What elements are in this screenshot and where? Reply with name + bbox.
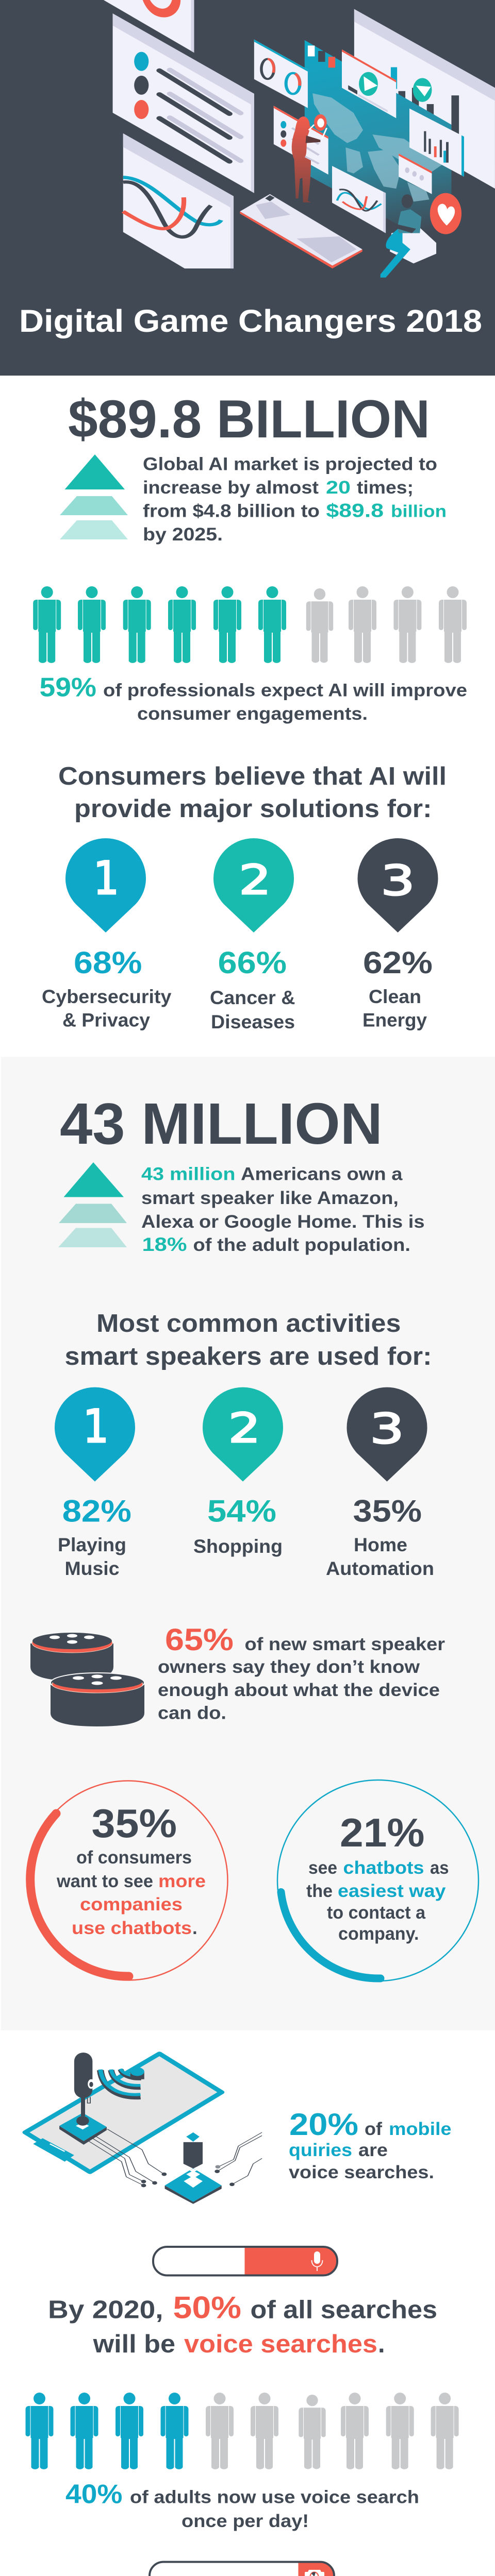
wifi signal: [101, 2069, 141, 2097]
dashboard panel: list: [113, 13, 254, 193]
illustration: phone with microphone and circuit: [25, 2053, 262, 2204]
icon: smart speakers: [30, 1633, 144, 1726]
activity 1: playing music: Music: [65, 1558, 120, 1579]
activity 3: home automation: 35%: [353, 1494, 422, 1529]
text: 50 percent voice searches: voice searches: [184, 2330, 377, 2358]
seated man with tablet: [381, 193, 461, 278]
callout: 35 percent want chatbots: [28, 1781, 228, 1980]
screen: list: [274, 106, 328, 175]
activity 3: home automation: Home: [354, 1534, 407, 1555]
activity 2: shopping: [193, 1387, 283, 1557]
icon: pin 1: [65, 838, 146, 933]
section: voice search: [25, 2053, 475, 2576]
text: 20 percent mobile queries: of: [365, 2119, 382, 2139]
solution 2: cancer and diseases: Diseases: [211, 1011, 295, 1032]
text: 20 percent mobile queries: are: [358, 2140, 388, 2160]
icon: pin 1: 1: [93, 852, 119, 905]
text: AI market projection: $89.8: [326, 500, 384, 521]
callout: 35 percent want chatbots: want to see: [56, 1871, 153, 1891]
microphone on pad: [59, 2053, 107, 2145]
icon: pin 2: [213, 838, 294, 933]
search bar: voice: [153, 2247, 338, 2275]
heading: common activities: [65, 1310, 432, 1370]
solution 1: cybersecurity: 68%: [74, 945, 142, 980]
icon: camera: [305, 2570, 324, 2576]
heading: common activities: smart speakers are used for:: [65, 1343, 432, 1370]
text: 40 percent statistic: of adults now use voice search: [130, 2487, 419, 2507]
text: smart speaker ownership: Alexa or Google Home. This is: [141, 1212, 425, 1232]
callout: 35 percent want chatbots: 35%: [92, 1801, 177, 1846]
text: smart speaker ownership: [141, 1164, 425, 1255]
solution 2: cancer and diseases: 66%: [218, 945, 287, 980]
activity 1: playing music: [55, 1387, 135, 1579]
heading: common activities: Most common activities: [96, 1310, 401, 1337]
phone: [25, 2054, 222, 2172]
text: 65 percent statistic: can do.: [158, 1703, 226, 1723]
text: 20 percent mobile queries: quiries: [289, 2140, 352, 2160]
heading: major solutions: [58, 762, 447, 823]
screen: wave chart: [332, 166, 386, 233]
text: 59 percent statistic: of professionals expect AI will improve: [103, 680, 467, 701]
activity 2: shopping: Shopping: [193, 1536, 283, 1557]
solution 3: clean energy: Clean: [369, 986, 421, 1007]
screen: play video: [342, 49, 396, 118]
text: 40 percent statistic: [65, 2480, 419, 2531]
text: AI market projection: billion: [391, 502, 447, 520]
solution 1: cybersecurity: Cybersecurity: [42, 986, 172, 1007]
icon: pin 1: 1: [83, 1400, 109, 1453]
text: AI market projection: [143, 454, 447, 545]
keyboard: [240, 194, 362, 268]
icon: pin 3: [358, 838, 438, 933]
heading: major solutions: provide major solutions for:: [74, 795, 432, 823]
icon: pin 3: 3: [381, 857, 415, 905]
dashboard panel: line chart: [123, 133, 234, 268]
world map screen: [305, 40, 451, 253]
receiver tower: [165, 2132, 222, 2204]
text: AI market projection: 20: [326, 478, 351, 498]
icon: pin 1: [55, 1387, 135, 1482]
activity 3: home automation: [326, 1387, 434, 1579]
screen: donut charts: [254, 40, 308, 108]
text: 40 percent statistic: once per day!: [182, 2511, 309, 2531]
icon: pin 3: 3: [370, 1405, 404, 1453]
callout: 35 percent want chatbots: of consumers: [76, 1848, 192, 1868]
callout: 21 percent chatbots easiest: the: [306, 1881, 333, 1901]
solution 1: cybersecurity: [42, 838, 172, 1031]
screen: three dots: [399, 154, 432, 194]
callout: 21 percent chatbots easiest: easiest way: [338, 1881, 446, 1901]
text: 50 percent voice searches: 50%: [173, 2291, 241, 2325]
solution 3: clean energy: [358, 838, 438, 1031]
text: 50 percent voice searches: will be: [93, 2330, 175, 2358]
search bar: images: [150, 2562, 335, 2576]
text: smart speaker ownership: of the adult population.: [193, 1235, 410, 1255]
big number: $89.8 billion: $89.8 BILLION: [68, 389, 430, 449]
text: AI market projection: times;: [357, 478, 414, 498]
pictogram: 40 percent of adults: [26, 2393, 459, 2469]
callout: 21 percent chatbots easiest: 21%: [340, 1810, 425, 1855]
text: AI market projection: from $4.8 billion to: [143, 501, 320, 521]
circuit traces: [87, 2129, 262, 2185]
callout: 21 percent chatbots easiest: company.: [338, 1924, 419, 1944]
text: 65 percent statistic: enough about what the device: [158, 1680, 440, 1700]
text: 59 percent statistic: consumer engagements.: [137, 704, 368, 724]
dashboard panel: far right: [354, 9, 495, 189]
text: 65 percent statistic: owners say they don’t know: [158, 1657, 420, 1677]
icon: pin 3: [346, 1387, 427, 1482]
activity 1: playing music: 82%: [62, 1494, 131, 1529]
text: 50 percent voice searches: [48, 2291, 437, 2358]
circuit dots: [141, 2165, 235, 2187]
text: 20 percent mobile queries: voice searches.: [289, 2162, 434, 2182]
dashboard panel: top ring: [104, 0, 194, 53]
solution 2: cancer and diseases: Cancer &: [210, 987, 295, 1008]
callout: 21 percent chatbots easiest: as: [430, 1858, 449, 1878]
section: AI market: [33, 389, 467, 1032]
solution 3: clean energy: 62%: [363, 945, 433, 980]
text: 20 percent mobile queries: [289, 2107, 452, 2182]
header illustration: data dashboards: [104, 0, 495, 278]
text: 65 percent statistic: 65%: [165, 1622, 234, 1657]
callout: 35 percent want chatbots: use chatbots: [72, 1918, 192, 1938]
text: 50 percent voice searches: By 2020,: [48, 2296, 163, 2324]
text: smart speaker ownership: 43 million: [141, 1164, 235, 1184]
heading: major solutions: Consumers believe that AI will: [58, 762, 447, 790]
callout: 35 percent want chatbots: companies: [80, 1894, 183, 1914]
solution 2: cancer and diseases: [210, 838, 295, 1032]
pictogram: 59 percent of professionals: [33, 586, 467, 663]
text: 50 percent voice searches: of all searches: [251, 2296, 437, 2324]
text: 65 percent statistic: [158, 1622, 445, 1723]
text: 50 percent voice searches: .: [378, 2330, 385, 2358]
woman figure: [292, 114, 327, 202]
header panel: [0, 0, 495, 376]
callout: 21 percent chatbots easiest: [277, 1780, 478, 1981]
activity 1: playing music: Playing: [58, 1534, 126, 1555]
section: smart speakers: [1, 1057, 495, 2030]
solution 3: clean energy: Energy: [362, 1010, 427, 1031]
icon: pin 2: 2: [228, 1405, 260, 1452]
callout: 35 percent want chatbots: more: [158, 1871, 206, 1891]
text: AI market projection: Global AI market is projected to: [143, 454, 437, 474]
activity 3: home automation: Automation: [326, 1558, 434, 1579]
text: 59 percent statistic: 59%: [39, 673, 96, 703]
callout: 21 percent chatbots easiest: to contact a: [327, 1903, 426, 1923]
text: 40 percent statistic: 40%: [65, 2480, 123, 2510]
text: AI market projection: by 2025.: [143, 524, 223, 545]
screen: bar chart: [409, 108, 464, 177]
text: 20 percent mobile queries: 20%: [289, 2107, 358, 2142]
callout: 21 percent chatbots easiest: see: [308, 1858, 337, 1878]
text: smart speaker ownership: smart speaker like Amazon,: [141, 1188, 399, 1208]
activity 2: shopping: 54%: [207, 1494, 276, 1529]
text: AI market projection: increase by almost: [143, 478, 319, 498]
icon: stacked pyramid: [58, 1162, 127, 1247]
text: 59 percent statistic: [39, 673, 467, 724]
big number: 43 million: 43 MILLION: [60, 1091, 383, 1156]
callout: 21 percent chatbots easiest: chatbots: [343, 1858, 424, 1878]
icon: pin 2: 2: [239, 857, 271, 904]
icon: stacked pyramid: [60, 454, 128, 539]
text: 20 percent mobile queries: mobile: [389, 2119, 452, 2139]
icon: microphone: [311, 2251, 323, 2271]
solution 1: cybersecurity: & Privacy: [62, 1010, 150, 1031]
text: 65 percent statistic: of new smart speaker: [244, 1634, 445, 1654]
text: smart speaker ownership: 18%: [142, 1234, 187, 1255]
title: Digital Game Changers 2018: [19, 303, 482, 338]
icon: pin 2: [203, 1387, 283, 1482]
signal node: [130, 2067, 144, 2079]
text: smart speaker ownership: Americans own a: [241, 1164, 403, 1184]
callout: 35 percent want chatbots: .: [192, 1918, 197, 1938]
